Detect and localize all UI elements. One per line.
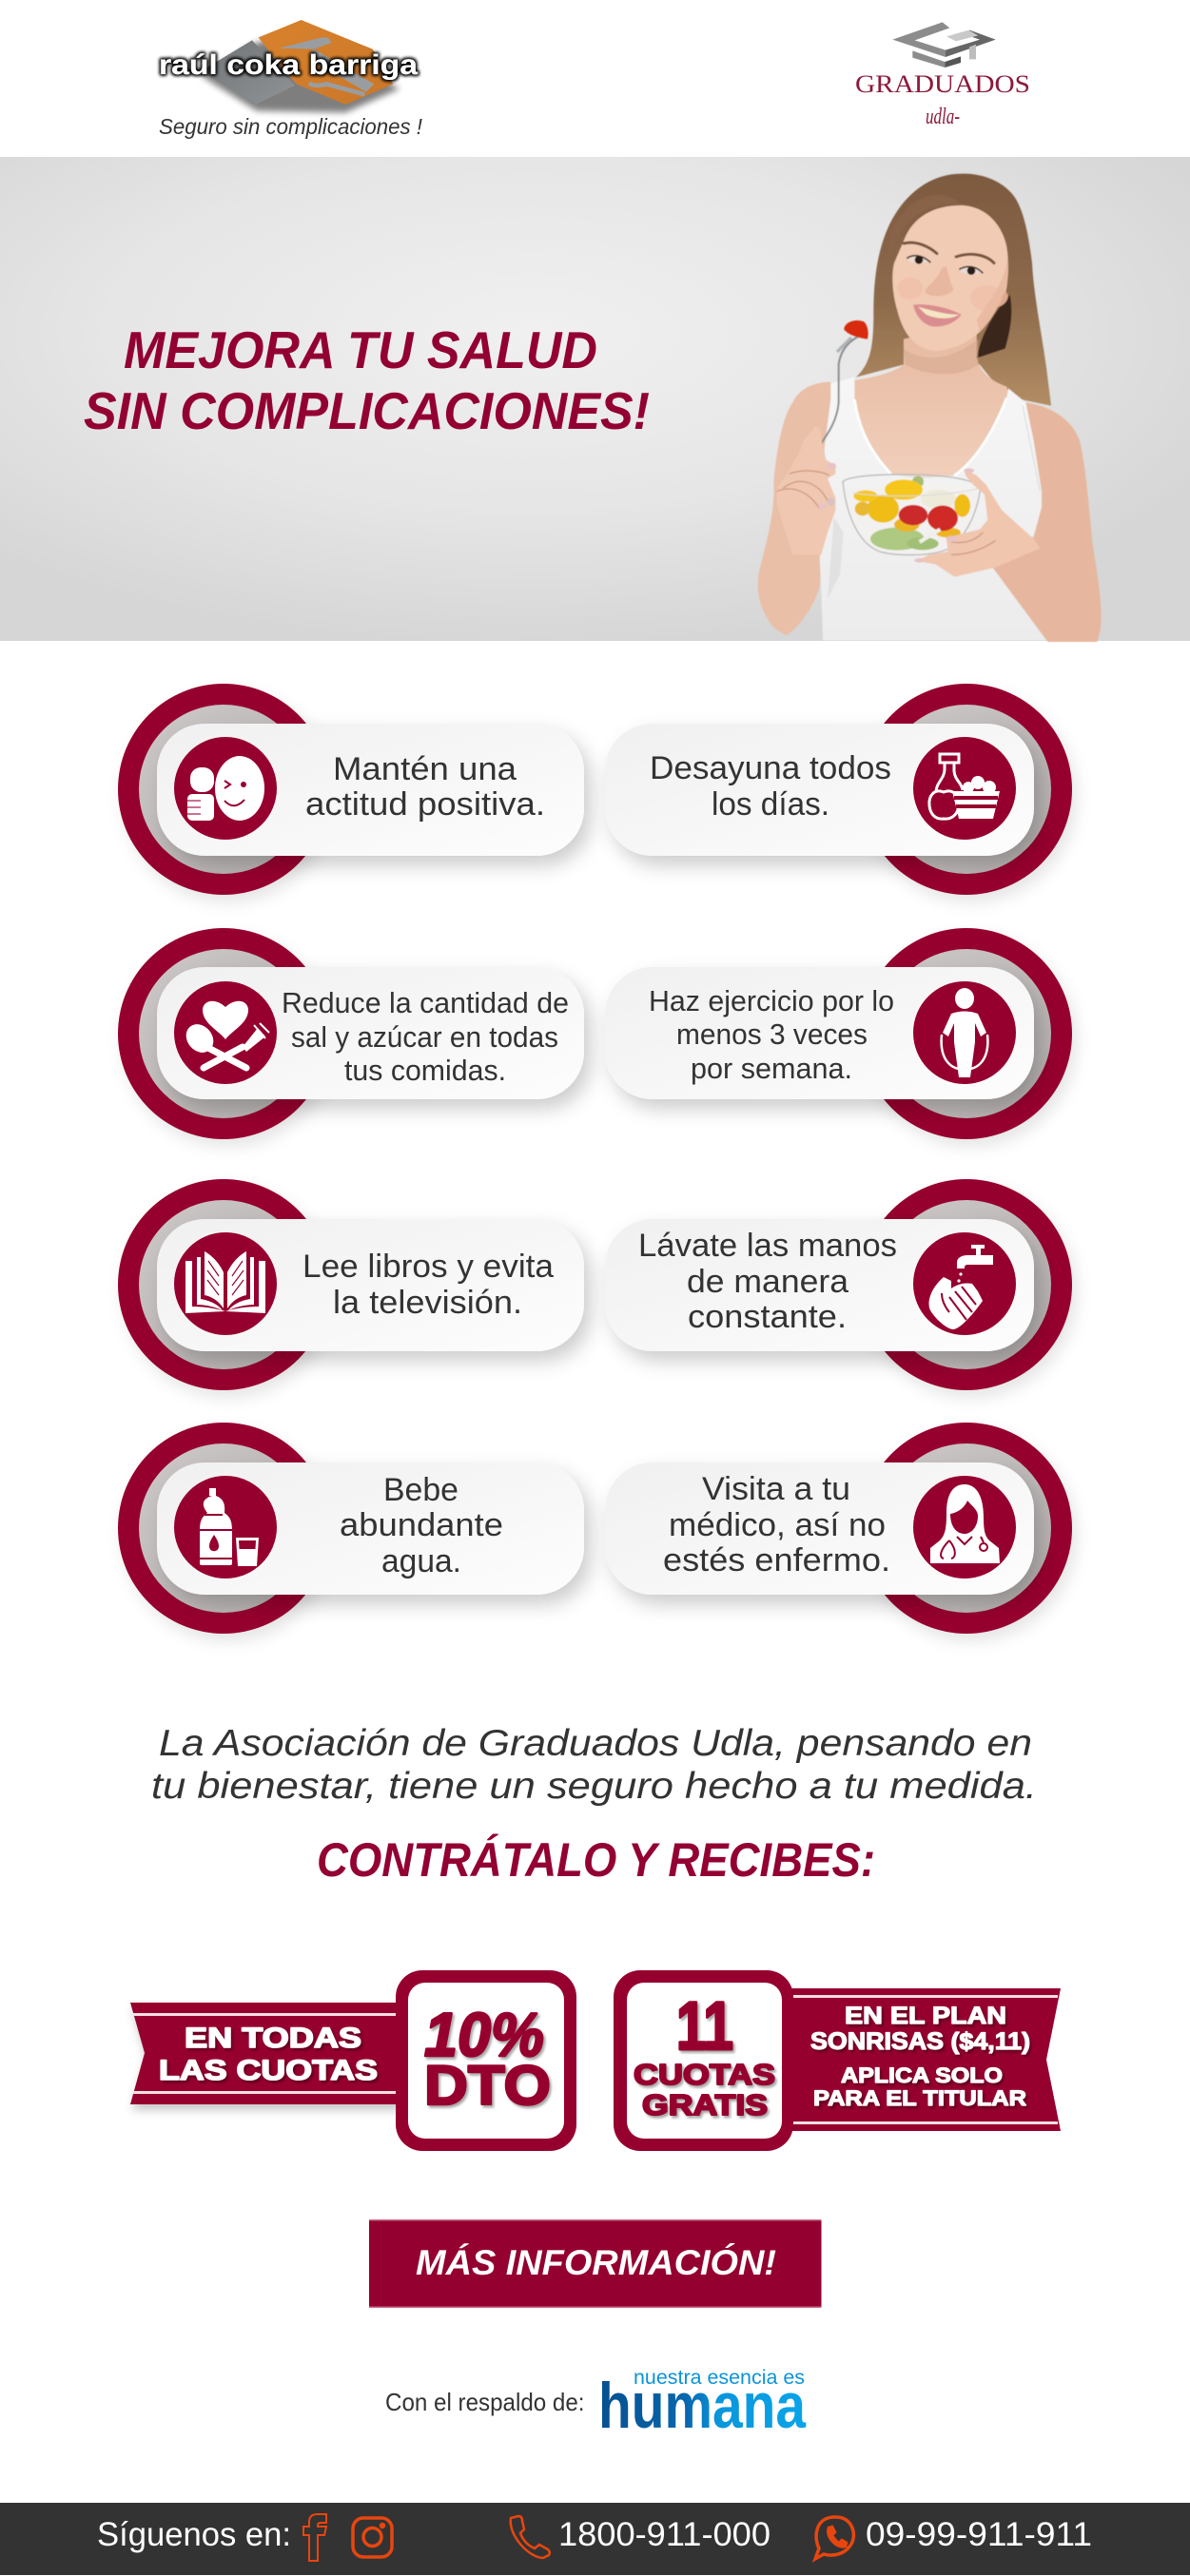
box: 11 cuotas gratis: CUOTAS	[634, 2058, 775, 2091]
intro paragraph	[151, 1723, 1037, 1807]
tip card: Reduce la cantidad de sal y azúcar	[118, 928, 584, 1139]
tip card: Bebe abundante agua: agua.	[381, 1543, 461, 1579]
icon: faucet and hands	[929, 1245, 993, 1329]
box: 10% DTO: DTO	[424, 2055, 551, 2117]
ribbon: plan sonrisas	[790, 1988, 1061, 2131]
button: más información: MÁS INFORMACIÓN!	[416, 2243, 776, 2282]
tip card: Bebe abundante agua: abundante	[340, 1507, 503, 1543]
tip card: Mantén una actitud positiva	[118, 684, 584, 895]
icon: heart, spoon and fork	[181, 1001, 269, 1068]
tip card: Reduce la cantidad de sal y azúcar: tus comidas.	[344, 1054, 506, 1087]
logo: raúl coka barriga	[159, 20, 423, 139]
tip card: Visita a tu médico: médico, así no	[669, 1507, 886, 1543]
heading: contrátalo y recibes: CONTRÁTALO Y RECIBES:	[317, 1833, 875, 1887]
box: 11 cuotas gratis: 11	[676, 1989, 733, 2064]
intro paragraph: La Asociación de Graduados Udla, pensando en	[159, 1723, 1032, 1764]
tip card: Desayuna todos los días	[605, 684, 1072, 895]
backing text: Con el respaldo de:	[385, 2388, 584, 2416]
tip card: Desayuna todos los días: Desayuna todos	[650, 750, 891, 786]
tip card: Visita a tu médico: Visita a tu	[702, 1471, 850, 1507]
tip card: Desayuna todos los días: los días.	[712, 786, 829, 823]
tip card: Visita a tu médico	[605, 1423, 1072, 1634]
ribbon: plan sonrisas: SONRISAS ($4,11)	[810, 2028, 1030, 2055]
icon: female doctor with stethoscope	[930, 1484, 1000, 1563]
footer bar: 09-99-911-911	[866, 2516, 1092, 2553]
box: 10% DTO: 10%	[424, 2000, 544, 2069]
ribbon: en todas las cuotas	[130, 2003, 400, 2104]
tip card: Visita a tu médico: estés enfermo.	[663, 1542, 890, 1579]
social text: Síguenos en:	[97, 2516, 291, 2553]
footer bar	[0, 2503, 1190, 2575]
tip card: Haz ejercicio por lo menos 3 veces por semana: menos 3 veces	[676, 1017, 868, 1051]
box: 10% DTO	[396, 1970, 576, 2151]
ribbon: plan sonrisas: EN EL PLAN	[845, 2003, 1006, 2029]
icon: facebook	[303, 2514, 326, 2561]
icon: whatsapp	[815, 2517, 853, 2559]
tip card: Haz ejercicio por lo menos 3 veces por semana: por semana.	[691, 1052, 852, 1085]
tip card: Haz ejercicio por lo menos 3 veces por semana: Haz ejercicio por lo	[649, 984, 894, 1017]
ribbon: en todas las cuotas: LAS CUOTAS	[159, 2055, 378, 2086]
tip card: Lávate las manos de manera constante: constante.	[688, 1299, 847, 1335]
ribbon: plan sonrisas: PARA EL TITULAR	[813, 2086, 1026, 2110]
tip card: Lávate las manos de manera constante: de manera	[687, 1264, 849, 1300]
icon: instagram	[353, 2518, 392, 2557]
offer: 11 cuotas gratis	[614, 1970, 1061, 2151]
tip card: Lee libros y evita la televisión: la televisión.	[333, 1285, 522, 1321]
hero title: MEJORA TU SALUD	[124, 320, 597, 379]
icon: phone	[511, 2516, 550, 2558]
icon: open book	[185, 1251, 265, 1313]
offer: 10% discount	[130, 1970, 576, 2151]
tip card: Mantén una actitud positiva: actitud positiva.	[305, 786, 545, 823]
hero banner background	[0, 157, 1190, 641]
hero title: SIN COMPLICACIONES!	[84, 381, 650, 440]
logo: humana: humana	[598, 2370, 807, 2442]
icon: water bottle and glass	[200, 1488, 259, 1566]
tip card: Lee libros y evita la televisión	[118, 1179, 584, 1390]
logo: Graduados UDLA: udla-	[926, 105, 960, 129]
icon: person jumping rope	[942, 988, 987, 1077]
logo: Graduados UDLA	[855, 22, 1030, 129]
box: 11 cuotas gratis: GRATIS	[642, 2088, 768, 2121]
intro paragraph: tu bienestar, tiene un seguro hecho a tu medida.	[151, 1766, 1037, 1807]
hero title	[84, 320, 650, 440]
button: más información	[369, 2219, 822, 2308]
tip card: Haz ejercicio por lo menos 3 veces por semana	[605, 928, 1072, 1139]
logo: raúl coka barriga: Seguro sin complicaciones !	[159, 114, 423, 139]
ribbon: plan sonrisas: APLICA SOLO	[841, 2063, 1003, 2087]
tip card: Lee libros y evita la televisión: Lee libros y evita	[302, 1249, 554, 1285]
icon: smile with thumbs up	[187, 756, 264, 821]
tip card: Mantén una actitud positiva: Mantén una	[333, 751, 517, 787]
tip card: Bebe abundante agua: Bebe	[383, 1472, 458, 1508]
photo: woman holding a salad bowl	[758, 174, 1102, 642]
logo: Graduados UDLA: GRADUADOS	[855, 70, 1030, 98]
footer bar: 1800-911-000	[558, 2516, 771, 2553]
box: 11 cuotas gratis	[614, 1970, 793, 2151]
ribbon: en todas las cuotas: EN TODAS	[185, 2023, 361, 2054]
tip card: Bebe abundante agua	[118, 1423, 584, 1634]
tip card: Reduce la cantidad de sal y azúcar: sal y azúcar en todas	[291, 1020, 558, 1054]
tip card: Lávate las manos de manera constante	[605, 1179, 1072, 1390]
tip card: Reduce la cantidad de sal y azúcar: Reduce la cantidad de	[282, 986, 569, 1019]
logo: raúl coka barriga: raúl coka barriga	[159, 49, 418, 81]
icon: bottle, apple and bowl	[929, 754, 1000, 819]
tip card: Lávate las manos de manera constante: Lávate las manos	[638, 1228, 897, 1264]
logo: humana: nuestra esencia es	[634, 2367, 805, 2389]
